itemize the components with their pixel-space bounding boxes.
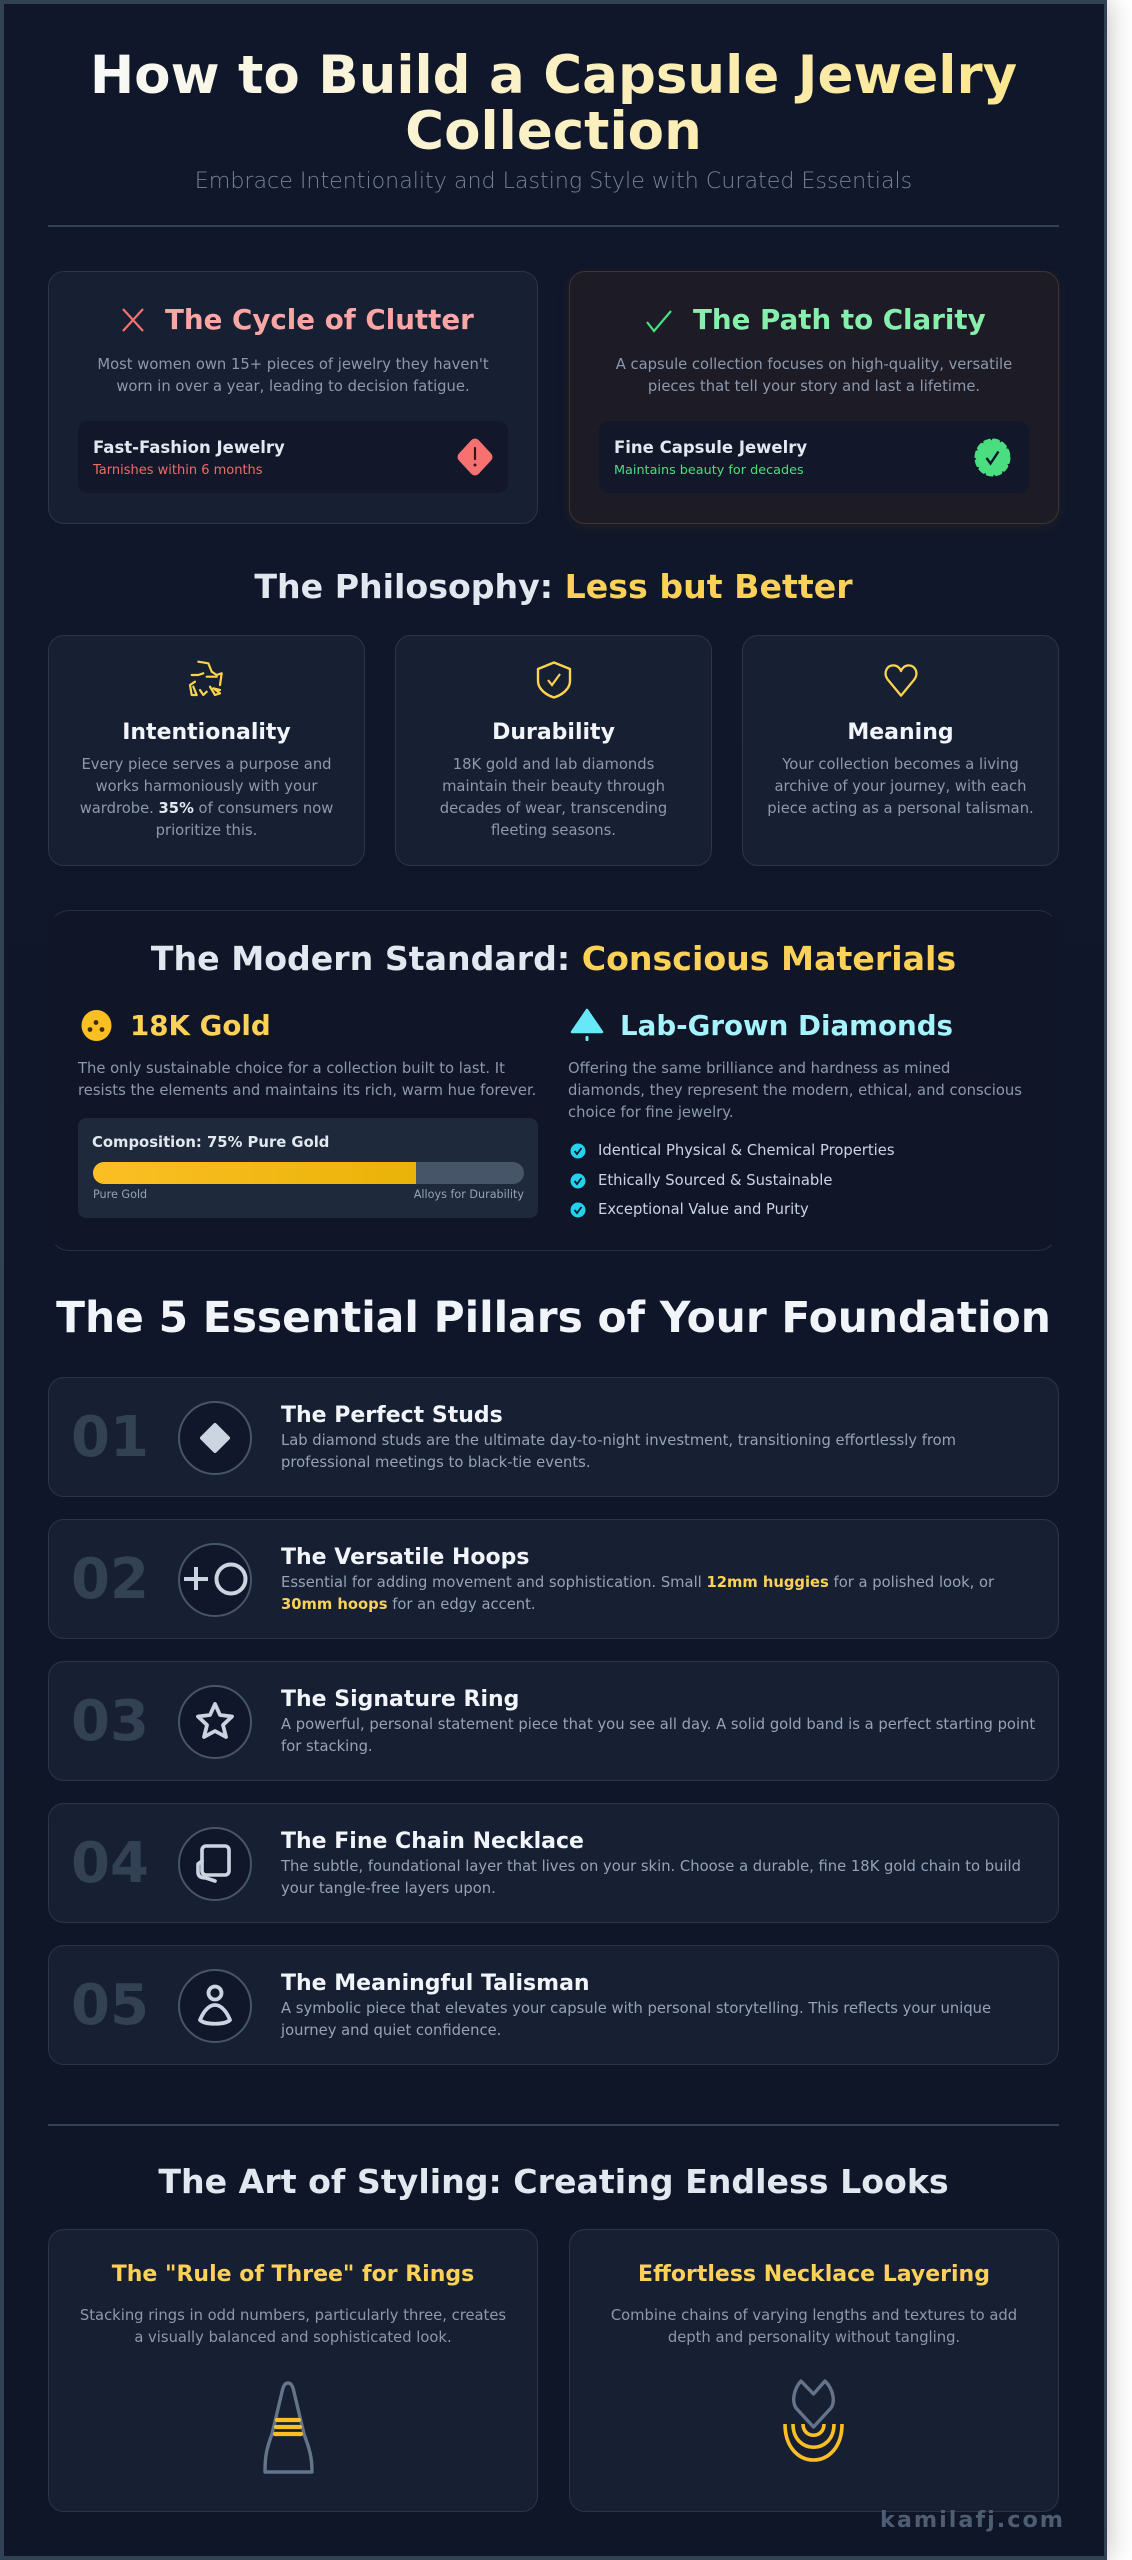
label: maintains beauty: Maintains beauty for decades — [614, 463, 804, 478]
icon: chain necklace — [178, 1827, 252, 1901]
text: clutter description — [97, 356, 489, 395]
text: diamond description: Offering the same brilliance and hardness as mined — [568, 1060, 950, 1077]
heading: intentionality: Intentionality — [122, 720, 291, 745]
box: fast-fashion jewelry — [78, 421, 508, 493]
text: intentionality description: wardrobe. 35% of consumers now — [80, 800, 333, 817]
heading: cycle of clutter: The Cycle of Clutter — [165, 303, 474, 336]
text: layering description: Combine chains of varying lengths and textures to add — [611, 2307, 1017, 2324]
panel: meaning — [742, 635, 1059, 866]
pillar description: for stacking. — [281, 1738, 373, 1755]
pillar description — [281, 1432, 956, 1471]
text: meaning description — [767, 756, 1034, 817]
pillar description: your tangle-free layers upon. — [281, 1880, 496, 1897]
pillar description: Essential for adding movement and sophistication. Small 12mm huggies for a polished look, or — [281, 1574, 994, 1591]
chart: gold composition — [78, 1118, 538, 1218]
text: rule of three description: a visually balanced and sophisticated look. — [134, 2329, 452, 2346]
panel: pillar 02 — [48, 1519, 1059, 1639]
label: fine capsule jewelry: Fine Capsule Jewelry — [614, 438, 807, 457]
list item 1: Identical Physical & Chemical Properties — [598, 1142, 894, 1159]
text: intentionality description: works harmoniously with your — [96, 778, 317, 795]
text: diamond description: choice for fine jewelry. — [568, 1104, 734, 1121]
icon: talisman figure — [178, 1969, 252, 2043]
number 03: 03 — [71, 1689, 149, 1754]
text: intentionality description: Every piece serves a purpose and — [81, 756, 332, 773]
text: clarity description — [616, 356, 1012, 395]
text: layering description: depth and personality without tangling. — [668, 2329, 960, 2346]
icon: check 2 — [570, 1174, 586, 1188]
pillar description: 30mm hoops for an edgy accent. — [281, 1596, 536, 1613]
panel: the cycle of clutter — [48, 271, 538, 524]
heading: the art of styling: The Art of Styling: Creating Endless Looks — [158, 2162, 949, 2201]
heading: the philosophy: The Philosophy: Less but Better — [254, 567, 853, 606]
panel: pillar 04 — [48, 1803, 1059, 1923]
text: layering description — [611, 2307, 1017, 2346]
pillar description: The subtle, foundational layer that lives on your skin. Choose a durable, fine 18K gold chain to build — [281, 1858, 1021, 1875]
text: meaning description: archive of your journey, with each — [775, 778, 1026, 795]
watermark: kamilafj.com — [880, 2507, 1065, 2533]
icon: recycle — [188, 660, 223, 696]
icon: x mark — [122, 308, 144, 332]
text: durability description: 18K gold and lab diamonds — [453, 756, 654, 773]
number 01: 01 — [71, 1405, 149, 1470]
heading: rule of three: The "Rule of Three" for Rings — [112, 2262, 474, 2287]
number 04: 04 — [71, 1831, 149, 1896]
pillar title: The Meaningful Talisman — [281, 1971, 590, 1996]
label: composition: Composition: 75% Pure Gold — [92, 1134, 329, 1151]
bar fill: 75 percent — [93, 1162, 416, 1184]
list: diamond benefits — [570, 1142, 894, 1218]
title: How to Build a Capsule Jewelry — [90, 45, 1017, 106]
pillar title: The Fine Chain Necklace — [281, 1829, 584, 1854]
pillar description — [281, 1716, 1035, 1755]
pillar description: A powerful, personal statement piece that you see all day. A solid gold band is a perfect starting point — [281, 1716, 1035, 1733]
heading: 18k gold: 18K Gold — [130, 1009, 271, 1042]
label: alloys: Alloys for Durability — [414, 1188, 524, 1201]
icon: heart — [884, 664, 918, 697]
pillar description: A symbolic piece that elevates your capsule with personal storytelling. This reflects your unique — [281, 2000, 991, 2017]
pillar title: The Versatile Hoops — [281, 1545, 529, 1570]
heading: necklace layering: Effortless Necklace Layering — [638, 2262, 990, 2287]
title — [48, 48, 1059, 160]
text: durability description — [440, 756, 667, 839]
panel: intentionality — [48, 635, 365, 866]
label: pure gold: Pure Gold — [93, 1188, 147, 1201]
icon: check 3 — [570, 1202, 586, 1218]
text: durability description: fleeting seasons. — [491, 822, 616, 839]
text: meaning description: piece acting as a personal talisman. — [767, 800, 1034, 817]
text: gold description: resists the elements and maintains its rich, warm hue forever. — [78, 1082, 536, 1099]
icon: gold nugget — [82, 1010, 112, 1041]
panel: pillar 05 — [48, 1945, 1059, 2065]
text: gold description: The only sustainable choice for a collection built to last. It — [78, 1060, 505, 1077]
label: tarnishes: Tarnishes within 6 months — [93, 463, 263, 478]
panel: the modern standard — [49, 910, 1058, 1251]
subtitle: Embrace Intentionality and Lasting Style with Curated Essentials — [195, 168, 912, 194]
heading: meaning: Meaning — [847, 720, 954, 745]
text: durability description: decades of wear, transcending — [440, 800, 667, 817]
pillar title: The Signature Ring — [281, 1687, 519, 1712]
label: fast-fashion jewelry: Fast-Fashion Jewelry — [93, 438, 285, 457]
heading: modern standard: The Modern Standard: Conscious Materials — [151, 939, 956, 978]
pillar title: The Perfect Studs — [281, 1403, 503, 1428]
icon: layered necklace — [783, 2379, 844, 2462]
text: clarity description: A capsule collection focuses on high-quality, versatile — [616, 356, 1012, 373]
text: clutter description: Most women own 15+ pieces of jewelry they haven't — [97, 356, 489, 373]
list item 3: Exceptional Value and Purity — [598, 1201, 809, 1218]
bar track — [93, 1162, 524, 1184]
icon: warning diamond — [458, 438, 492, 476]
pillar description: journey and quiet confidence. — [281, 2022, 501, 2039]
heading: path to clarity: The Path to Clarity — [693, 303, 986, 336]
text: intentionality description — [80, 756, 333, 839]
text: clutter description: worn in over a year, leading to decision fatigue. — [116, 378, 470, 395]
pillar description — [280, 2000, 991, 2039]
icon: shield check — [536, 661, 572, 699]
text: clarity description: pieces that tell your story and last a lifetime. — [648, 378, 980, 395]
text: diamond description: diamonds, they represent the modern, ethical, and conscious — [568, 1082, 1022, 1099]
panel: pillar 01 — [48, 1377, 1059, 1497]
list item 2: Ethically Sourced & Sustainable — [598, 1172, 832, 1189]
heading: the 5 essential pillars: The 5 Essential Pillars of Your Foundation — [56, 1293, 1051, 1342]
icon: stud diamond — [178, 1401, 252, 1475]
icon: plus and hoop — [178, 1543, 252, 1617]
pillar description: professional meetings to black-tie events. — [281, 1454, 591, 1471]
text: durability description: maintain their beauty through — [442, 778, 665, 795]
text: intentionality description: prioritize this. — [156, 822, 257, 839]
text: gold description — [78, 1060, 536, 1099]
box: fine capsule jewelry — [599, 421, 1029, 493]
panel: durability — [395, 635, 712, 866]
title: Collection — [405, 101, 702, 162]
text: meaning description: Your collection becomes a living — [782, 756, 1019, 773]
panel: rule of three — [48, 2229, 538, 2512]
heading: lab-grown diamonds: Lab-Grown Diamonds — [620, 1009, 953, 1042]
icon: diamond — [570, 1008, 604, 1041]
pillar description — [281, 1574, 994, 1613]
icon: check mark — [646, 310, 672, 333]
text: rule of three description: Stacking rings in odd numbers, particularly three, creates — [80, 2307, 506, 2324]
number 02: 02 — [71, 1547, 149, 1612]
panel: necklace layering — [569, 2229, 1059, 2512]
text: rule of three description — [80, 2307, 506, 2346]
heading: durability: Durability — [492, 720, 615, 745]
panel: pillar 03 — [48, 1661, 1059, 1781]
pillar description — [280, 1858, 1021, 1897]
panel: the path to clarity — [569, 271, 1059, 524]
icon: seal check — [974, 438, 1010, 476]
icon: check 1 — [570, 1144, 586, 1158]
icon: star — [178, 1685, 252, 1759]
number 05: 05 — [71, 1973, 149, 2038]
icon: ring stack on finger — [263, 2381, 314, 2474]
pillar description: Lab diamond studs are the ultimate day-to-night investment, transitioning effortlessly from — [281, 1432, 956, 1449]
text: diamond description — [568, 1060, 1022, 1121]
